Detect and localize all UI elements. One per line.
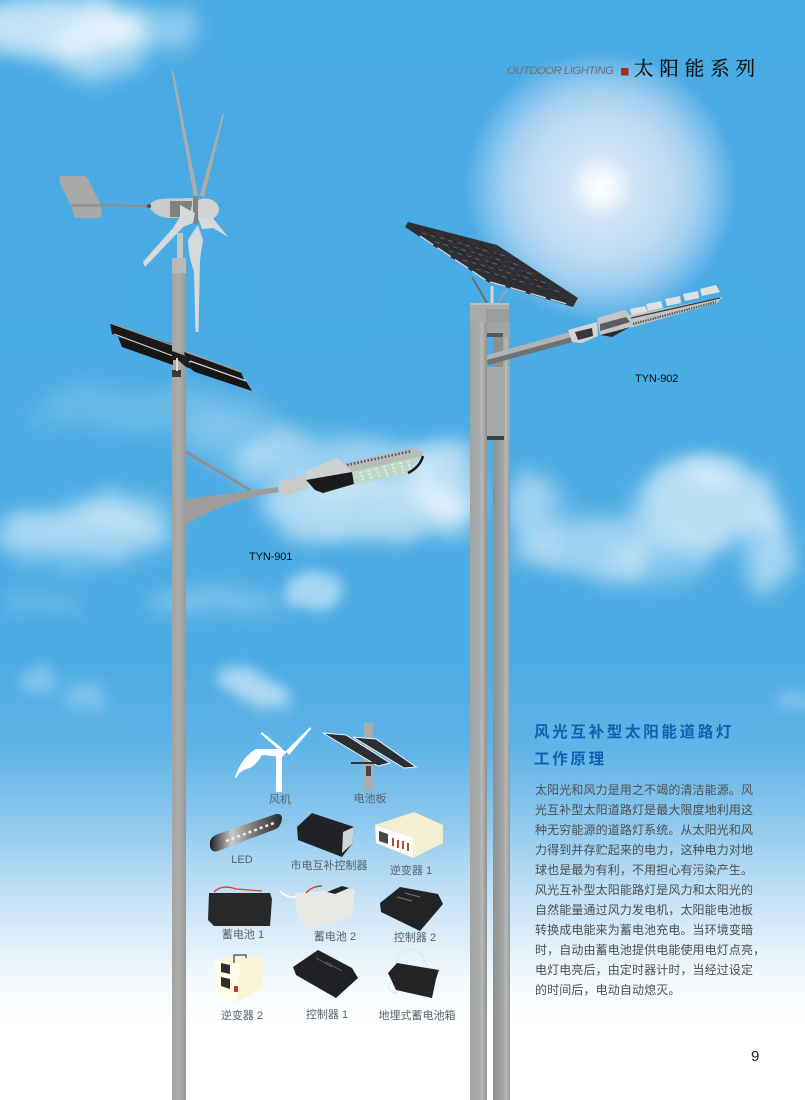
model label TYN-902: TYN-902 [635,373,678,385]
label: 蓄电池 1 [222,928,264,941]
lower blades [143,205,228,332]
mast neck [177,233,183,259]
pole [172,258,186,1100]
component: buried battery box [378,949,456,1022]
product TYN-902: solar street light [405,222,723,1100]
body text: 太阳光和风力是用之不竭的清洁能源。风 [535,782,753,797]
lamp arm [487,332,573,365]
body text: 时，自动由蓄电池提供电能使用电灯点亮， [535,942,765,957]
body text: 电灯电亮后，由定时器计时，当经过设定 [535,962,753,977]
component: solar panels [323,723,416,805]
body text: 球也是最为有利，不用担心有污染产生。 [535,862,753,877]
label: 控制器 2 [394,930,436,944]
body text: 种无穷能源的道路灯系统。从太阳光和风 [535,822,753,837]
component: battery 1 [208,887,272,941]
component: LED [210,814,282,866]
double pole [470,322,510,1100]
solar panels [110,323,252,391]
body text: 的时间后，电动自动熄灭。 [535,982,680,997]
lamp strut and arm [186,452,279,525]
body text: 转换成电能来为蓄电池充电。当环境变暗 [535,922,753,937]
component: battery 2 [280,886,356,943]
label: 风机 [269,792,291,806]
label: 逆变器 1 [390,863,432,877]
component: inverter 2 [215,955,263,1022]
label: 蓄电池 2 [314,930,356,943]
component: inverter 1 [375,812,443,877]
solar panel [405,222,578,307]
label: 地埋式蓄电池箱 [378,1008,456,1022]
body text: 自然能量通过风力发电机，太阳能电池板 [535,902,753,917]
body text: 力得到并存贮起来的电力，这种电力对地 [535,842,753,857]
label: 电池板 [354,791,386,805]
model label TYN-901: TYN-901 [249,551,292,563]
section heading [534,722,734,768]
clouds [0,0,805,717]
component gallery [208,723,456,1022]
product TYN-901: wind solar street light [59,71,424,1100]
upper blades [172,71,224,197]
component: wind turbine [235,727,311,806]
tail vane [59,176,148,218]
page number: 9 [751,1048,759,1065]
header English label: OUTDOOR LIGHTING [507,65,614,77]
header red square [621,68,628,76]
LED lamp head [279,448,424,496]
label: 逆变器 2 [221,1008,263,1022]
body text: 风光互补型太阳能路灯是风力和太阳光的 [535,882,753,897]
nacelle [147,196,219,224]
panel supports [472,277,507,305]
label: LED [231,854,253,866]
header Chinese title: 太阳能系列 [634,58,761,80]
label: 控制器 1 [306,1007,348,1021]
component: grid complementary controller [290,813,368,872]
header [507,58,761,80]
component: controller 1 [293,950,358,1021]
body text: 光互补型太阳道路灯是最大限度地利用这 [535,802,753,817]
label: 市电互补控制器 [290,858,368,872]
body text [535,782,765,997]
sun glow [461,47,741,327]
pole cap [470,303,509,322]
section heading: 风光互补型太阳能道路灯 [534,722,734,741]
section heading: 工作原理 [534,750,607,768]
component: controller 2 [380,887,443,944]
lamp head [568,285,723,343]
